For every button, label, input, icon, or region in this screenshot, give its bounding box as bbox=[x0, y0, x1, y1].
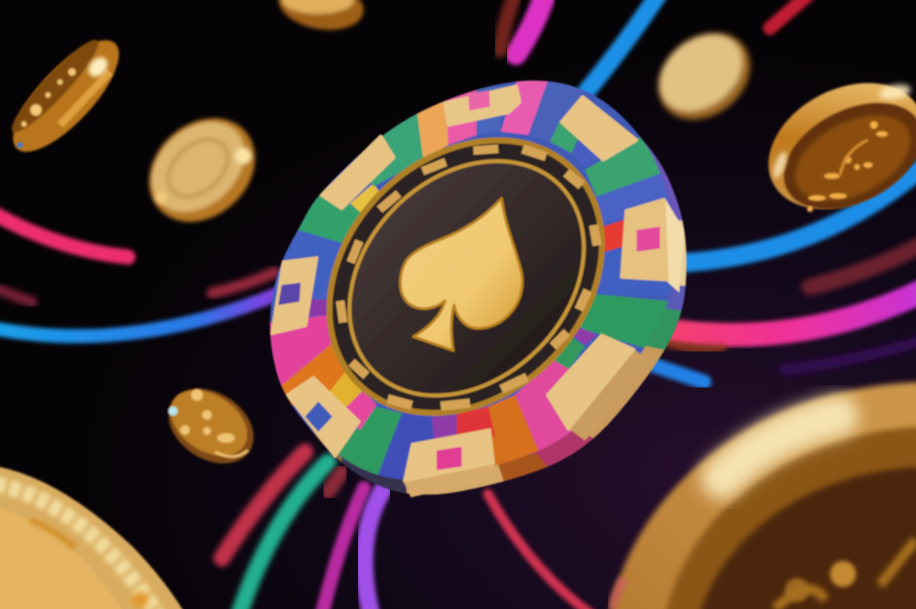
coin: large bottom left bbox=[0, 466, 186, 609]
tile: top bbox=[445, 87, 519, 125]
poker chip bbox=[269, 80, 688, 498]
coin: small gold lower left bbox=[154, 373, 268, 479]
chip side edge bbox=[312, 140, 688, 496]
tile: right bbox=[621, 198, 684, 293]
centre disc bbox=[302, 114, 631, 443]
tile: upper right bbox=[562, 97, 636, 159]
tile: upper left bbox=[322, 137, 393, 208]
coin: top left tilted bbox=[0, 25, 135, 167]
centre: gold ring and dark band bbox=[274, 85, 657, 468]
tile: lower right bbox=[547, 335, 651, 441]
coin: cream blurred left bbox=[128, 97, 276, 243]
chip face stripes bbox=[269, 80, 672, 480]
icon: gold spade bbox=[400, 198, 522, 351]
tile: bottom bbox=[403, 429, 502, 497]
tile: left bbox=[271, 257, 317, 334]
coin: top partial bbox=[274, 0, 368, 36]
coin: large bottom right bbox=[605, 382, 916, 609]
coin: gold top right bbox=[747, 58, 916, 234]
coin: cream blurred top right bbox=[641, 14, 767, 138]
tile: lower left bbox=[287, 377, 359, 457]
